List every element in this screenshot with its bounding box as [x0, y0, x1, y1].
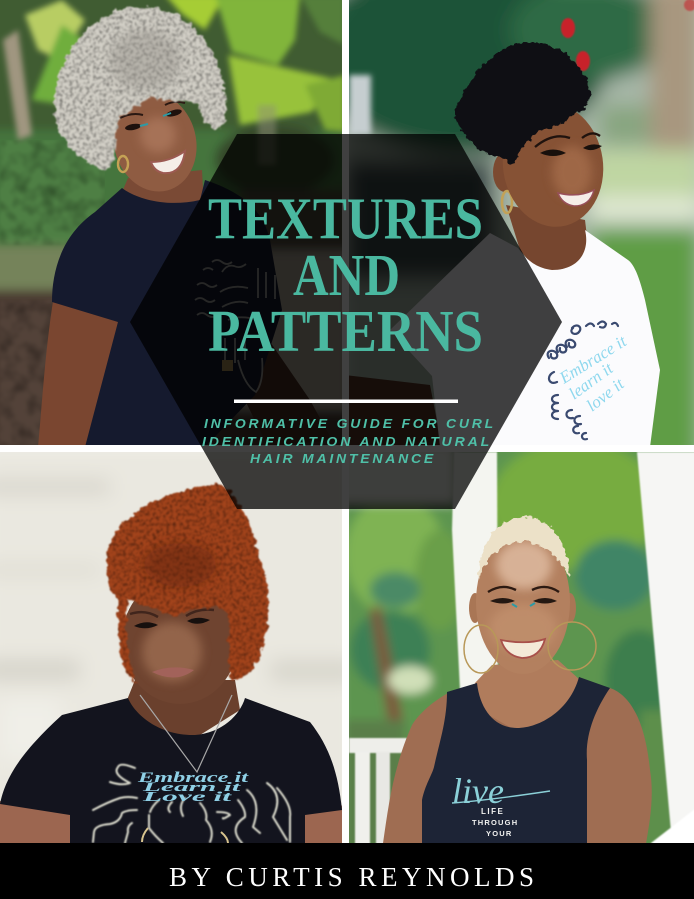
smile [501, 639, 545, 658]
shirt lettering: Learn it [141, 779, 241, 794]
shirt lettering [138, 772, 249, 801]
shirt lettering: LIFE [481, 807, 504, 816]
hoop earrings [464, 622, 596, 673]
subtitle: IDENTIFICATION AND NATURAL [202, 435, 492, 449]
neck [125, 680, 240, 735]
copper curly hair [107, 484, 268, 684]
face [114, 96, 197, 192]
arms [0, 801, 342, 843]
near arm [38, 295, 118, 447]
shirt [52, 180, 282, 447]
shirt lettering: live [452, 771, 504, 811]
eyes [535, 133, 602, 156]
white shirt [390, 230, 660, 447]
shirt lettering: learn it [565, 358, 617, 403]
panel: photo of woman with short blonde hair [340, 440, 694, 860]
title: TEXTURES [208, 186, 483, 252]
shirt lettering: Love it [141, 790, 233, 805]
panel: photo of woman with copper curly hair [0, 452, 342, 843]
earring [118, 156, 128, 172]
lips [152, 667, 194, 678]
shoulders and arms [382, 688, 652, 850]
black shirt [0, 698, 342, 850]
shirt graphic [195, 260, 275, 392]
shirt lettering [560, 336, 627, 412]
shirt lettering: THROUGH [472, 818, 518, 827]
navy tank top [422, 677, 610, 850]
hair shading [144, 543, 216, 587]
subtitle: HAIR MAINTENANCE [250, 452, 436, 466]
earring [502, 191, 512, 213]
face [476, 530, 570, 674]
shirt lettering: Embrace it [555, 331, 631, 388]
shirt lettering: YOUR [486, 829, 512, 838]
panel: photo of woman with black coiled hair [349, 0, 694, 445]
white post [349, 75, 371, 135]
hair shading [109, 30, 181, 90]
necklace [140, 695, 232, 772]
neck [475, 660, 580, 730]
silver curly hair [55, 7, 226, 172]
subtitle: INFORMATIVE GUIDE FOR CURL [204, 417, 496, 431]
foliage and mulch texture [0, 140, 105, 445]
neck [506, 205, 586, 270]
eyes [120, 102, 185, 131]
red blossoms [561, 0, 694, 71]
eyes [130, 610, 214, 628]
hexagon title panel [130, 134, 562, 509]
shirt curl design [548, 322, 618, 439]
ear [493, 156, 508, 192]
footer bar [0, 843, 694, 899]
smile [151, 151, 185, 173]
eyes [488, 587, 559, 607]
pale collar lines [142, 828, 228, 843]
face [123, 600, 232, 680]
smile [558, 190, 594, 206]
black coiled hair [454, 42, 590, 165]
far arm [345, 375, 442, 447]
palm leaves [3, 0, 345, 165]
shirt lettering: Embrace it [136, 770, 249, 786]
face [503, 112, 604, 226]
neck [123, 170, 203, 203]
ear stud [234, 636, 242, 644]
title [208, 186, 483, 364]
title: AND [293, 242, 400, 308]
author byline: BY CURTIS REYNOLDS [169, 862, 539, 892]
shirt curl design [93, 765, 290, 843]
shirt lettering [452, 771, 550, 838]
ears [469, 593, 481, 623]
title: PATTERNS [208, 298, 483, 364]
far arm [246, 344, 318, 416]
subtitle [202, 417, 496, 466]
necklace pendant [222, 360, 233, 371]
blonde short hair [479, 517, 570, 578]
white porch columns [349, 452, 694, 850]
shirt lettering: love it [583, 374, 629, 415]
divider line [234, 400, 458, 403]
panel: photo of woman with silver curly hair [0, 0, 342, 445]
